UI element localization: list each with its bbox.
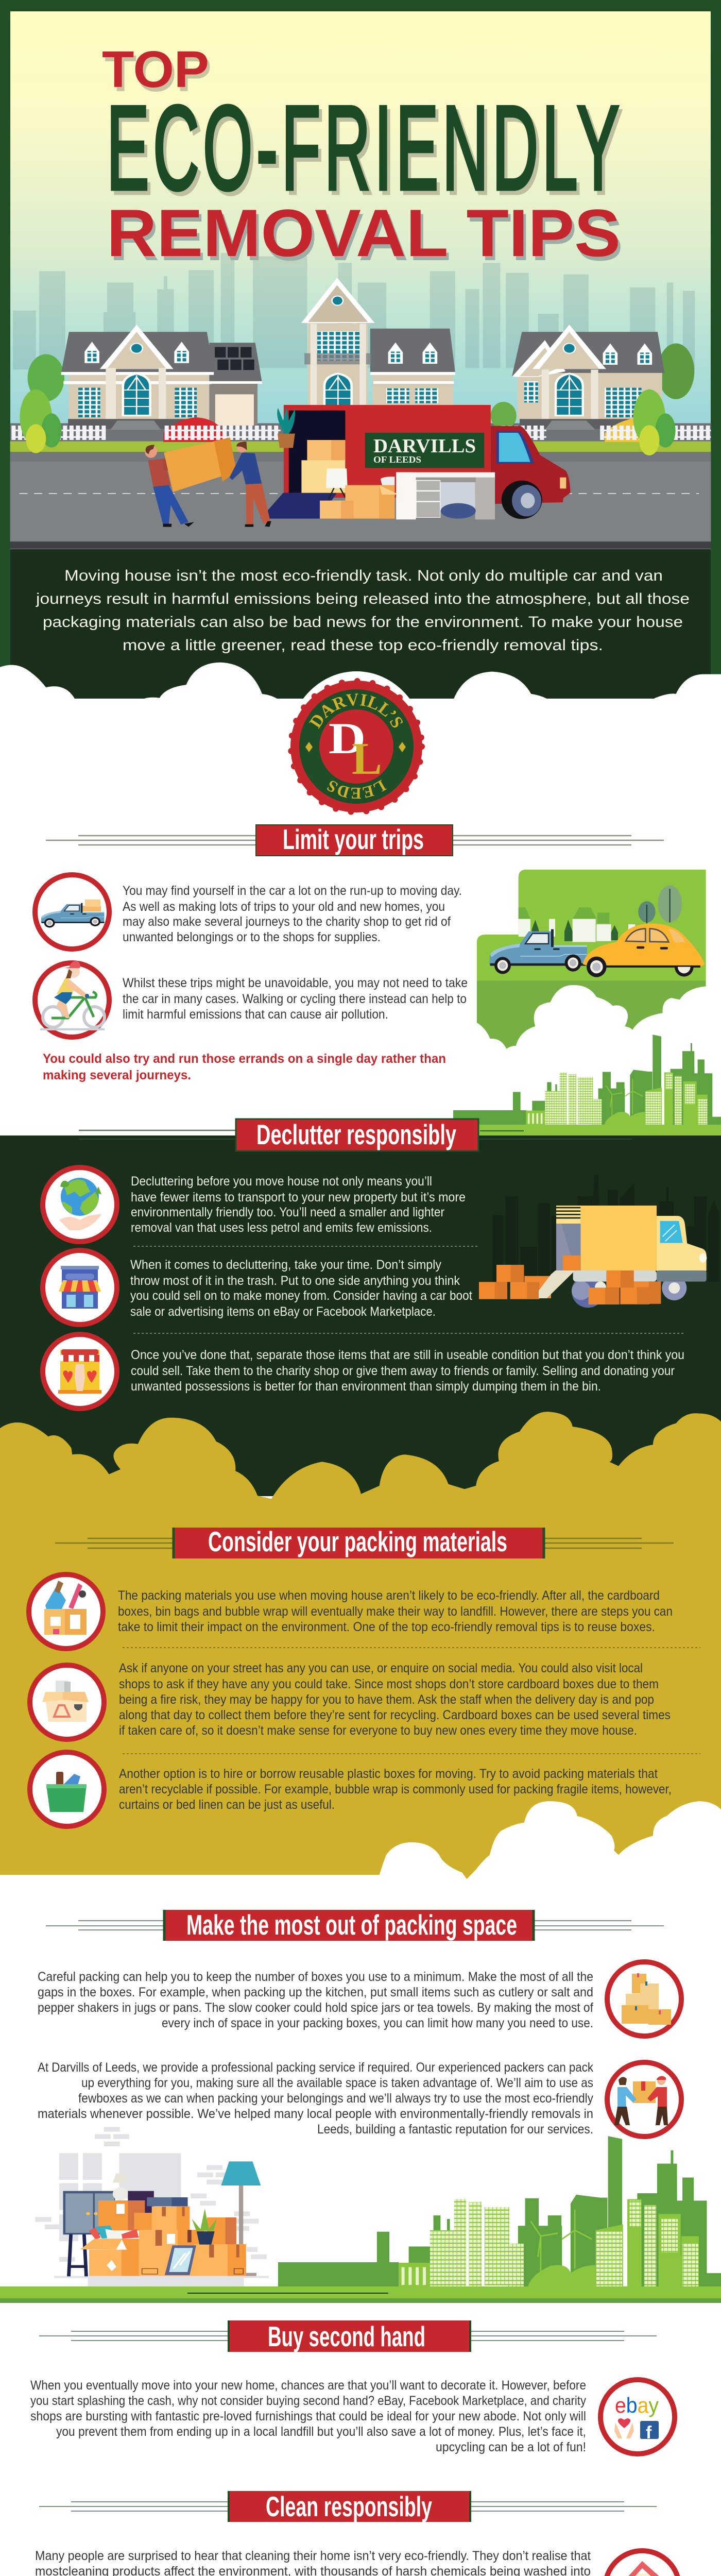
text: careful packing: every inch of space in your packing boxes, you can limit how many you need to use.	[162, 2016, 593, 2030]
truck	[556, 1206, 581, 1224]
text: second tip on trips: limit harmful emissions that can cause air pollution.	[123, 1007, 388, 1022]
dotted separators: declutter	[133, 1246, 684, 1333]
van box	[284, 405, 491, 498]
intro text: packaging materials can also be bad news for the environment. To make your house	[43, 614, 683, 631]
icon: recycled box	[30, 1665, 104, 1739]
text: buy second hand: upcycling can be a lot of fun!	[436, 2440, 586, 2454]
heading: Clean responsibly	[39, 2490, 657, 2522]
text: reusable plastic boxes: curtains or bed linen can be just as useful.	[119, 1798, 335, 1812]
boxes	[128, 2191, 154, 2213]
icon: house with plant	[605, 2551, 679, 2576]
text: take your time: When it comes to decluttering, take your time. Don’t simply	[130, 1258, 441, 1272]
text: cleaning products affect the environment	[35, 2549, 591, 2576]
trees behind houses	[28, 344, 694, 430]
text: second tip on trips: the car in many cases. Walking or cycling there instead can help to	[123, 992, 467, 1006]
page border: dark green frame	[0, 0, 721, 685]
text: professional packing service	[38, 2060, 593, 2137]
text: decluttering benefits	[131, 1174, 466, 1235]
callout: red tip: making several journeys.	[43, 1068, 191, 1082]
hero street scene	[10, 253, 711, 550]
yellow car	[583, 923, 705, 977]
illustration: cars on green panel with clouds	[475, 870, 707, 1054]
desk	[381, 477, 394, 485]
intro text: journeys result in harmful emissions being released into the atmosphere, but all those	[36, 590, 690, 607]
icon: ebay, charity and facebook: ebay	[615, 2393, 659, 2417]
cabinet	[63, 2191, 115, 2234]
text: buy second hand: you prevent them from ending up in a local landfill but you’ll also save a lot of money. Plus, let’s face it,	[56, 2425, 586, 2439]
boxes and ramp	[479, 1265, 661, 1304]
text: second tip on trips: Whilst these trips might be unavoidable, you may not need to take	[123, 976, 468, 990]
dotted separators: packing	[123, 1648, 700, 1754]
ground strips	[10, 423, 711, 443]
text: ask neighbours and shops: if taken care of, so it doesn’t make sense for everyone to buy new ones every time they move house.	[119, 1723, 637, 1738]
text: careful packing	[38, 1970, 593, 2030]
icon: shop front	[43, 1250, 117, 1325]
text: buy second hand: When you eventually move into your new home, chances are that you’ll want to decorate it. However, before	[30, 2378, 586, 2393]
van sign: DARVILLS OF LEEDS: DARVILLS	[373, 435, 476, 457]
van sign: DARVILLS OF LEEDS: OF LEEDS	[373, 454, 421, 465]
text: ask neighbours and shops: along that day to collect them before they’re sent for recycling. Cardboard boxes can be used several times	[119, 1708, 671, 1722]
text: decluttering benefits: environmentally friendly too. You’ll need a smaller and lighter	[131, 1205, 444, 1219]
callout: red tip: You could also try and run those errands on a single day rather than	[43, 1052, 446, 1066]
illustration: furniture and boxes	[36, 2127, 269, 2286]
van cab	[491, 426, 571, 504]
company sign background	[365, 433, 484, 468]
text: donate unused items: Once you’ve done that, separate those items that are still in useable condition but that you don’t think you	[131, 1348, 684, 1362]
hero title: REMOVAL TIPS	[109, 199, 623, 275]
text: reuse boxes: take to limit their impact on the environment. One of the top eco-friendly removal tips is to reuse boxes.	[118, 1620, 655, 1634]
plant	[192, 2209, 217, 2231]
sky gradient	[10, 11, 711, 542]
house: centre	[301, 278, 455, 416]
intro text: move a little greener, read these top eco-friendly removal tips.	[123, 637, 603, 654]
text: ask neighbours and shops	[119, 1661, 671, 1738]
text: take your time: you could sell on to make money from. Consider having a car boot	[130, 1289, 472, 1303]
intro text: Moving house isn’t the most eco-friendly task. Not only do multiple car and van	[64, 567, 663, 584]
logo: Darvill's of Leeds badge: D	[329, 714, 366, 763]
text: buy second hand: shops are bursting with fantastic pre-loved furnishings that could be ideal for your new abode. Not only will	[30, 2409, 586, 2424]
text: reuse boxes	[118, 1588, 673, 1634]
text: reuse boxes: The packing materials you use when moving house aren’t likely to be eco-friendly. After all, the cardboard	[118, 1588, 660, 1603]
hero title: TOP	[105, 45, 212, 103]
heading: Declutter responsibly: Declutter responsibly	[256, 1118, 456, 1150]
text: ask neighbours and shops: Ask if anyone on your street has any you can use, or enquire on social media. You could also visit local	[119, 1661, 643, 1675]
panel: dark intro band	[10, 549, 711, 699]
text: reusable plastic boxes	[119, 1767, 672, 1812]
text: cleaning products affect the environment: Many people are surprised to hear that cleaning their home isn’t very eco-friendly. They don’t realise that	[35, 2549, 591, 2563]
text: reusable plastic boxes: Another option is to hire or borrow reusable plastic boxes for moving. Try to avoid packing materials that	[119, 1767, 658, 1781]
cypress trees	[20, 389, 676, 455]
text: careful packing: Careful packing can help you to keep the number of boxes you use to a minimum. Make the most of all the	[38, 1970, 593, 1984]
text: buy second hand: you start splashing the cash, why not consider buying second hand? eBay, Facebook Marketplace, and charity	[30, 2394, 586, 2408]
pickup	[489, 929, 587, 974]
logo: Darvill's of Leeds badge: DARVILL’S	[309, 693, 403, 729]
wall bricks and window	[36, 2127, 269, 2286]
text: take your time: sale or advertising items on eBay or Facebook Marketplace.	[130, 1304, 436, 1319]
text: professional packing service: up everything for you, making sure all the available space is taken advantage of. We’ll aim to use as	[81, 2076, 593, 2090]
intro text	[36, 567, 690, 654]
road dashes	[20, 493, 699, 494]
distant skyline	[13, 253, 695, 371]
heading: Buy second hand	[39, 2320, 657, 2352]
text: decluttering benefits: removal van that uses less petrol and emits few emissions.	[131, 1221, 432, 1235]
hero title	[102, 41, 626, 275]
text: donate unused items	[131, 1348, 684, 1394]
heading: Buy second hand: Buy second hand	[268, 2320, 425, 2352]
panel: dark declutter section	[0, 1136, 721, 1496]
text: second tip on trips	[123, 976, 468, 1022]
heading: Consider your packing materials: Consider your packing materials	[208, 1526, 507, 1557]
callout: red tip	[43, 1052, 446, 1082]
text: take your time: throw most of it in the trash. Put to one side anything you think	[130, 1274, 460, 1288]
illustration: green city skyline, large	[0, 2136, 721, 2303]
cars behind fence	[163, 417, 223, 442]
mover: left	[145, 445, 194, 527]
text: take your time	[130, 1258, 472, 1319]
stacked boxes	[307, 440, 345, 461]
white clouds into next section	[380, 1801, 721, 1882]
panel: yellow packing section with cloud top	[0, 1412, 721, 1876]
hero title: REMOVAL TIPS	[107, 195, 621, 270]
house: right	[512, 325, 664, 430]
icon: pickup truck with boxes	[35, 875, 109, 949]
floor lamp	[239, 2185, 243, 2245]
text: ask neighbours and shops: shops to ask if they have any you could take. Since most shops don’t store cardboard boxes due to them	[119, 1677, 659, 1691]
icon: two packers holding box	[607, 2062, 681, 2137]
packing labels	[142, 2268, 158, 2274]
icon: ebay, charity and facebook	[600, 2380, 675, 2454]
illustration: green city skyline	[453, 1035, 721, 1136]
removal van scene	[145, 405, 571, 527]
text: buy second hand	[30, 2378, 586, 2454]
logo: Darvill's of Leeds badge	[288, 671, 425, 815]
icon: charity shop	[43, 1334, 117, 1409]
hero panel: sky, skyline, houses and removal van	[10, 11, 711, 550]
mirror	[165, 2245, 196, 2275]
text: professional packing service: Leeds, building a fantastic reputation for our services.	[317, 2122, 593, 2137]
plant	[277, 407, 295, 434]
illustration: yellow truck and boxes	[479, 1175, 719, 1308]
icon: stacked boxes	[607, 1962, 681, 2036]
text: decluttering benefits: have fewer items to transport to your new property but it’s more	[131, 1190, 466, 1205]
text: first tip on trips: may also make several journeys to the charity shop to get rid of	[123, 914, 451, 929]
logo: Darvill's of Leeds badge: L	[352, 734, 382, 784]
text: donate unused items: could sell. Take them to the charity shop or give them away to friends or family. Selling and donating your	[131, 1364, 675, 1378]
icon: box with household items	[29, 1574, 103, 1649]
dark skyline	[493, 1175, 719, 1282]
white cloud divider	[0, 663, 721, 831]
heading: Consider your packing materials	[55, 1526, 674, 1558]
icon: cyclist	[35, 961, 109, 1037]
text: donate unused items: unwanted possessions is better for than environment than simply dumping them in the bin.	[131, 1379, 601, 1394]
text: professional packing service: materials whenever possible. We’ve helped many local people with environmentally-friendly removals in	[38, 2107, 593, 2121]
fence	[11, 431, 711, 437]
heading: Clean responsibly: Clean responsibly	[266, 2490, 432, 2522]
text: professional packing service: fewboxes as we can when packing your belongings and we’ll always try to use the most eco-friendly	[78, 2091, 593, 2106]
text: first tip on trips: unwanted belongings or to the shops for supplies.	[123, 930, 381, 944]
text: reuse boxes: boxes, bin bags and bubble wrap will eventually make their way to landfill. However, there are steps you can	[118, 1604, 673, 1619]
text: first tip on trips	[123, 884, 462, 944]
text: reusable plastic boxes: aren’t recyclable if possible. For example, bubble wrap is commonly used for packing fragile items, however,	[119, 1782, 672, 1797]
trees	[638, 885, 682, 923]
white packing section background	[0, 1875, 721, 2576]
logo: Darvill's of Leeds badge: LEEDS	[327, 779, 387, 799]
icon: globe in hands	[43, 1167, 117, 1242]
text: professional packing service: At Darvills of Leeds, we provide a professional packing service if required. Our experienced packers can pack	[38, 2060, 593, 2075]
text: first tip on trips: As well as making lots of trips to your old and new homes, you	[123, 900, 445, 914]
text: decluttering benefits: Decluttering before you move house not only means you’ll	[131, 1174, 432, 1189]
heading: Limit your trips: Limit your trips	[283, 823, 424, 855]
heading: Make the most out of packing space: Make the most out of packing space	[186, 1909, 517, 1941]
hero title: TOP	[102, 41, 209, 98]
icon: recycling bin	[30, 1752, 104, 1826]
white section background	[0, 824, 721, 1136]
village behind cars	[519, 907, 609, 923]
icon: ebay, charity and facebook: f	[646, 2423, 652, 2443]
text: careful packing: pepper shakers in jugs or pans. The slow cooker could hold spice jars or tea towels. By making the most of	[38, 2001, 593, 2015]
heading: Declutter responsibly	[79, 1118, 631, 1151]
mover: right	[230, 441, 271, 527]
heading: Limit your trips	[46, 823, 664, 856]
carried box	[164, 438, 236, 492]
text: first tip on trips: You may find yourself in the car a lot on the run-up to moving day.	[123, 884, 462, 898]
open box with books	[89, 2226, 139, 2240]
text: ask neighbours and shops: being a fire risk, they may be happy for you to have them. Ask the staff when the delivery day is and pop	[119, 1692, 654, 1707]
house: left	[61, 325, 262, 430]
text: careful packing: gaps in the boxes. For example, when packing up the kitchen, put small items such as cutlery or salt and	[38, 1985, 593, 1999]
